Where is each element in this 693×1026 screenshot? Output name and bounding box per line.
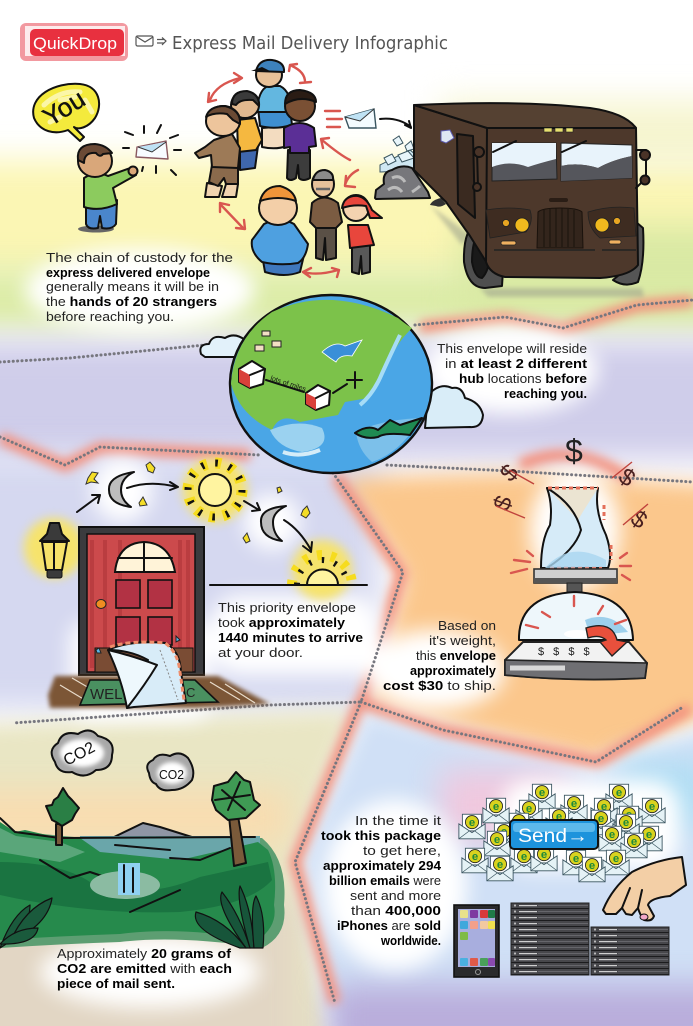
land: gulf and south: [270, 423, 324, 452]
moon one: [109, 472, 134, 507]
fingernail: [640, 914, 648, 920]
co2 clouds: CO2: [61, 739, 98, 770]
text: emails and iphones: billion emails were: [329, 874, 441, 888]
text: 1440 minutes: at your door.: [218, 646, 303, 660]
text: co2 emissions: Approximately 20 grams of: [57, 947, 232, 961]
person: grey-haired courier: [310, 170, 342, 260]
forest landscape: [0, 772, 285, 948]
door knob: [96, 600, 106, 608]
text: hub locations: This envelope will reside: [437, 342, 587, 356]
text: weight cost: cost $30 to ship.: [383, 679, 496, 693]
globe: [230, 295, 432, 473]
text: hub locations: [437, 342, 588, 401]
windshields: [492, 141, 632, 181]
sea creature island: [355, 418, 422, 438]
header: logo badge: [20, 23, 128, 61]
dollar signs: $: [626, 505, 652, 535]
delivery truck: [414, 103, 650, 297]
person: red haired courier: [342, 195, 382, 274]
truck side panel: [414, 105, 490, 268]
mail pile and smoke: [375, 136, 430, 199]
left bush: [0, 898, 52, 948]
truck roof: [414, 103, 636, 128]
sun one: [188, 463, 242, 517]
left small tree: [46, 788, 79, 845]
envelope through the door: [96, 636, 186, 708]
header: envelope arrow icon: [136, 36, 166, 46]
dollar signs: $: [614, 463, 640, 493]
lantern: [40, 523, 69, 578]
welcome mat and steps: C: [186, 685, 195, 700]
dollar signs: [488, 433, 652, 535]
postal scale: $ $ $ $: [538, 646, 590, 658]
text: chain of custody: [46, 251, 233, 324]
mail slot: [95, 648, 193, 672]
rising sun: [292, 555, 352, 585]
door window: [115, 542, 175, 572]
text: emails and iphones: took this package: [321, 829, 441, 843]
route with lots of miles: [266, 372, 362, 393]
text: weight cost: approximately: [410, 664, 496, 678]
you speech bubble: You: [37, 83, 90, 132]
scale dial: [519, 592, 633, 640]
hand pressing: [603, 857, 686, 920]
lake: [80, 836, 260, 862]
text: emails and iphones: sent and more: [350, 889, 441, 903]
soft hill halo: [0, 830, 285, 948]
text: 1440 minutes: took approximately: [218, 616, 345, 630]
text: emails and iphones: worldwide.: [380, 934, 441, 948]
land: north america: [231, 300, 412, 430]
text: chain of custody: generally means it will be in: [46, 280, 219, 294]
person: purple shirt handler: [284, 90, 316, 180]
phone stack short: [591, 927, 669, 975]
moon two: [261, 506, 286, 541]
green hills: [0, 822, 275, 940]
header: logo badge: QuickDrop: [33, 34, 117, 53]
send button: [510, 820, 598, 849]
cab lights: [544, 128, 573, 132]
scale base: [505, 642, 647, 679]
text: emails and iphones: In the time it: [355, 814, 442, 828]
person: you: [78, 144, 138, 232]
person: blue cap courier: [251, 60, 292, 148]
flying envelope with speed lines: [325, 109, 411, 128]
text: chain of custody: the hands of 20 strangers: [46, 295, 217, 309]
mirrors: [473, 147, 650, 191]
text: emails and iphones: than 400,000: [351, 904, 441, 918]
text: co2 emissions: CO2 are emitted with each: [57, 962, 232, 976]
horizon: [210, 584, 367, 586]
envelope with rays: [123, 125, 181, 175]
text: weight cost: [383, 619, 496, 693]
welcome mat and steps: WEL: [90, 686, 123, 703]
right tall tree: [212, 772, 260, 866]
welcome mat and steps: [48, 676, 270, 708]
distant mountain: [112, 823, 195, 838]
co2 clouds: [52, 730, 193, 790]
sequence arrows: [77, 495, 100, 512]
smartphone: [454, 905, 499, 977]
text: weight cost: this envelope: [416, 649, 496, 663]
text: weight cost: Based on: [438, 619, 496, 633]
person: yellow shirt handler: [231, 91, 262, 170]
red needle arrow: [586, 626, 627, 656]
text: 1440 minutes: 1440 minutes to arrive: [218, 631, 363, 645]
globe clouds: [200, 335, 483, 428]
truck front: [486, 128, 638, 278]
front door: [79, 527, 204, 675]
day night sequence: [77, 462, 367, 585]
dollar signs: $: [565, 433, 583, 469]
truck wheels: [430, 198, 643, 288]
door panels: [116, 580, 172, 645]
text: hub locations: reaching you.: [504, 387, 587, 401]
text: hub locations: hub locations before: [459, 372, 587, 386]
text: co2 emissions: piece of mail sent.: [57, 977, 175, 991]
text: emails and iphones: [321, 814, 442, 948]
text: chain of custody: before reaching you.: [46, 310, 174, 324]
text: hub locations: in at least 2 different: [445, 357, 588, 371]
truck door and logo: [441, 130, 475, 218]
headlights: [486, 207, 636, 250]
truck shadow: [430, 205, 644, 297]
heavy envelope on scale: [511, 488, 631, 580]
clearing and waterfall: [90, 863, 160, 899]
co2 clouds: CO2: [159, 767, 184, 782]
route with lots of miles: lots of miles: [269, 375, 307, 393]
text: emails and iphones: approximately 294: [323, 859, 441, 873]
text: emails and iphones: iPhones are sold: [337, 919, 441, 933]
send button: Send→: [518, 826, 588, 847]
hub box two: [306, 385, 330, 410]
postal scale: [505, 569, 647, 679]
text: weight cost: it's weight,: [429, 634, 496, 648]
text: emails and iphones: to get here,: [363, 844, 441, 858]
person: large blue polo man: [252, 186, 308, 275]
crowd of handlers: [195, 60, 382, 277]
email cloud: [459, 784, 665, 882]
handoff arrows: [208, 64, 358, 277]
right bush: [195, 886, 264, 948]
stars: [86, 462, 310, 543]
text: chain of custody: express delivered envelope: [46, 266, 210, 280]
header: title: Express Mail Delivery Infographic: [172, 33, 448, 54]
text: 1440 minutes: This priority envelope: [218, 601, 356, 615]
grille: [537, 198, 583, 248]
text: co2 emissions: [57, 947, 232, 991]
dollar signs: $: [488, 492, 518, 514]
text: chain of custody: The chain of custody for the: [46, 251, 233, 265]
lake: [322, 340, 362, 362]
you speech bubble: [33, 83, 99, 141]
text: 1440 minutes: [218, 601, 363, 660]
dollar signs: $: [495, 459, 524, 487]
section divider lines: [0, 300, 693, 1003]
hub box one: [239, 331, 281, 388]
phone stack tall: [511, 903, 589, 975]
person: brown uniform courier: [195, 106, 240, 197]
